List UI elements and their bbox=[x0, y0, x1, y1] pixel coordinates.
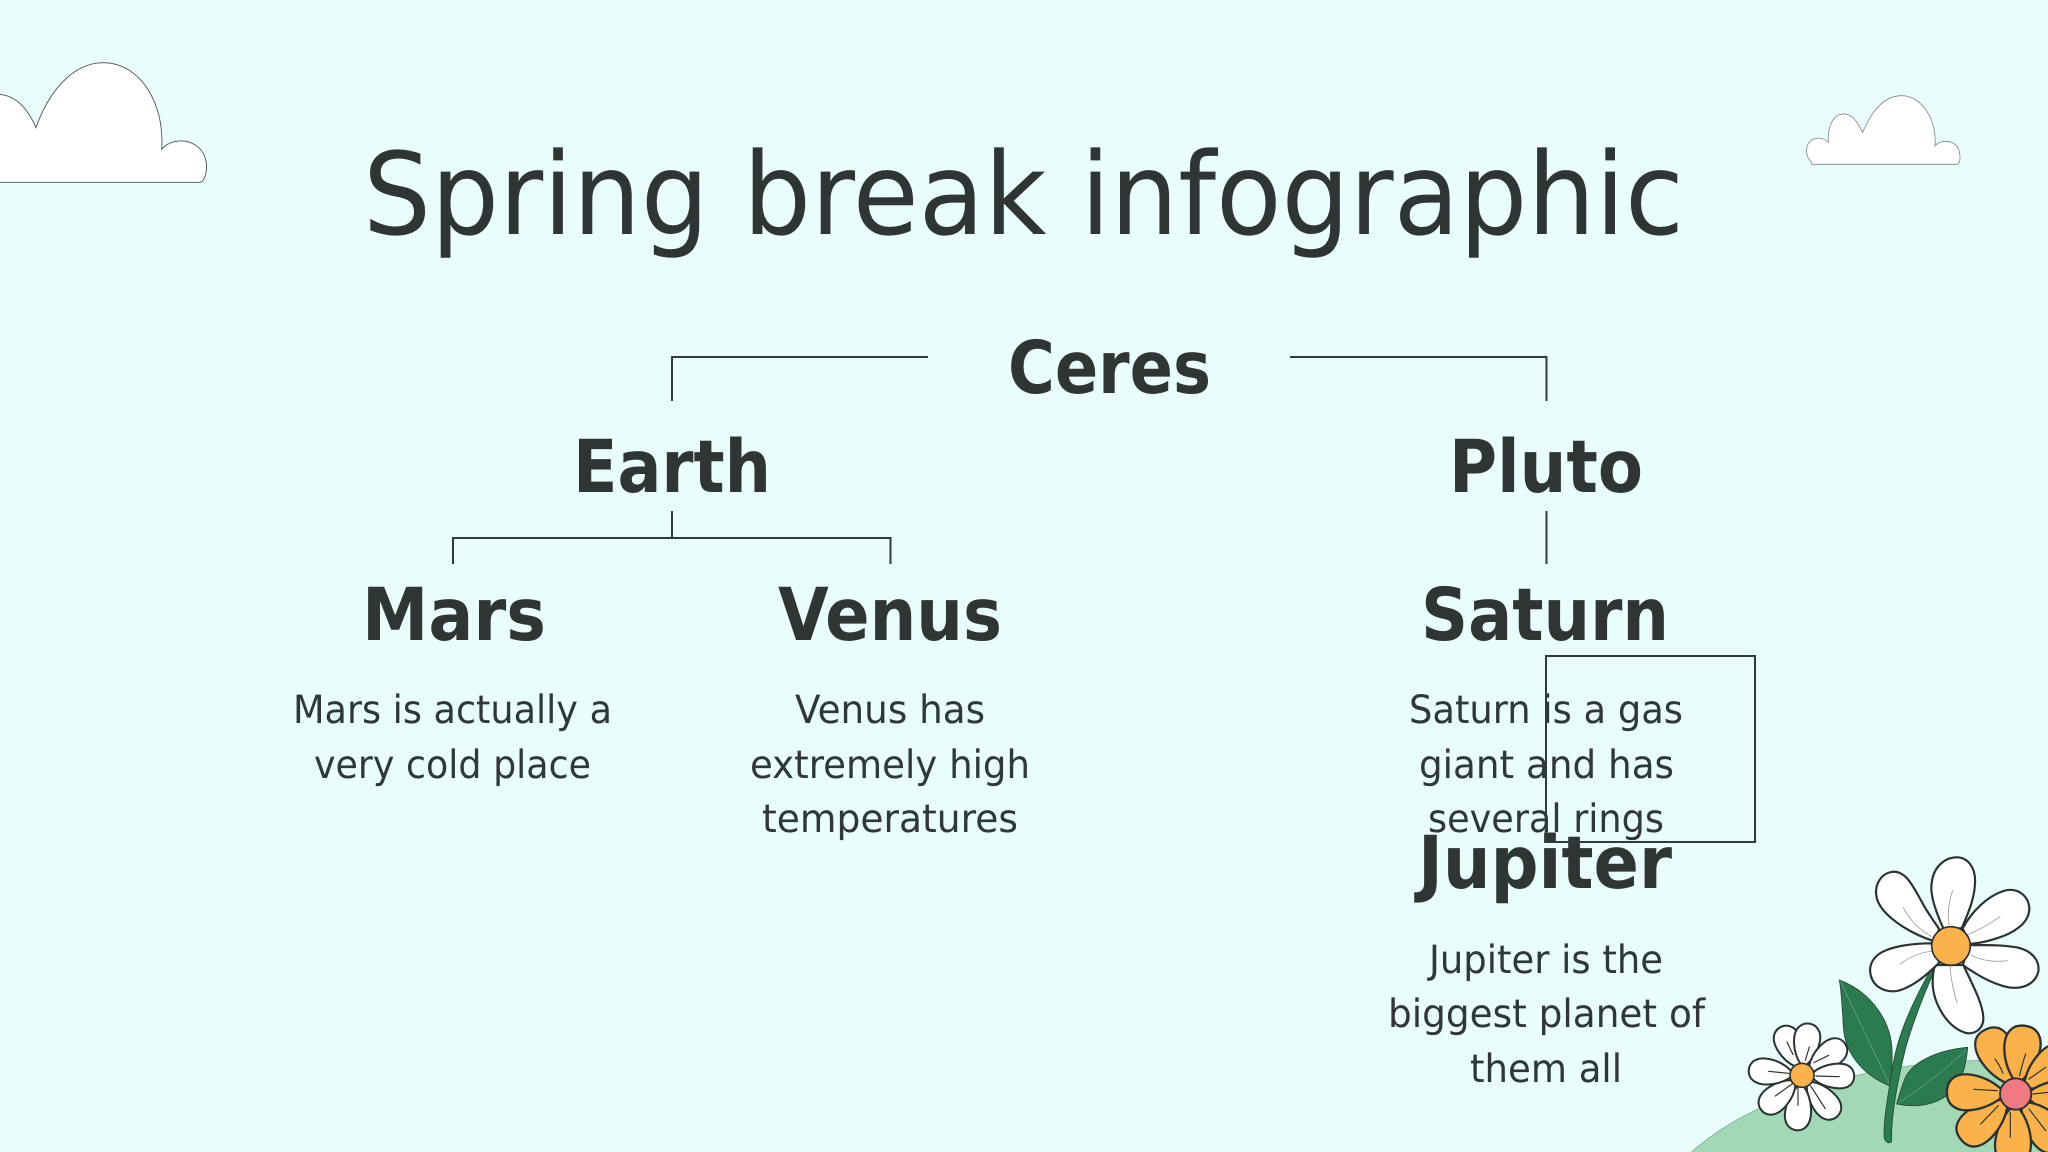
description: Jupiter: biggest planet of bbox=[1388, 992, 1706, 1037]
description: Venus bbox=[750, 688, 1030, 842]
heading: Jupiter: Jupiter bbox=[1413, 821, 1672, 906]
title: Spring break infographic bbox=[363, 128, 1684, 261]
heading: Pluto: Pluto bbox=[1449, 425, 1643, 510]
description: Venus: extremely high bbox=[750, 743, 1030, 788]
node: Venus bbox=[750, 573, 1030, 842]
icon: right cloud bbox=[1806, 96, 1960, 164]
hill bbox=[1689, 1060, 2048, 1152]
description: Venus: temperatures bbox=[762, 797, 1018, 842]
description: Saturn: several rings bbox=[1428, 797, 1664, 842]
description: Saturn: Saturn is a gas bbox=[1409, 688, 1683, 733]
node: Saturn bbox=[1409, 573, 1683, 842]
description: Mars: Mars is actually a bbox=[293, 688, 612, 733]
heading: Venus: Venus bbox=[778, 573, 1002, 658]
description: Mars bbox=[293, 688, 612, 788]
icon: orange flower bbox=[1946, 1022, 2048, 1152]
heading: Mars: Mars bbox=[362, 573, 546, 658]
connector: Earth to Mars and Venus bbox=[453, 511, 890, 564]
icon: large white flower bbox=[1870, 857, 2039, 1033]
connector: Pluto to Saturn bbox=[1546, 511, 1548, 564]
empty outlined box bbox=[1546, 656, 1755, 842]
node: Jupiter bbox=[1388, 821, 1706, 1092]
heading: Ceres: Ceres bbox=[1008, 326, 1211, 411]
node: Mars bbox=[293, 573, 612, 788]
description: Jupiter: them all bbox=[1470, 1047, 1622, 1092]
description: Saturn bbox=[1409, 688, 1683, 842]
illustration: hill and flowers bbox=[1689, 857, 2048, 1152]
icon: stem and leaves bbox=[1839, 967, 1968, 1143]
description: Saturn: giant and has bbox=[1419, 743, 1674, 788]
description: Venus: Venus has bbox=[795, 688, 985, 733]
icon: left cloud bbox=[0, 63, 207, 182]
description: Mars: very cold place bbox=[314, 743, 591, 788]
description: Jupiter: Jupiter is the bbox=[1426, 938, 1663, 983]
heading: Earth: Earth bbox=[573, 425, 771, 510]
heading: Saturn: Saturn bbox=[1421, 573, 1669, 658]
icon: small white daisy bbox=[1747, 1022, 1854, 1132]
connector: Ceres to Earth bbox=[672, 357, 928, 401]
description: Jupiter bbox=[1388, 938, 1706, 1092]
connector: Ceres to Pluto bbox=[1290, 357, 1546, 401]
